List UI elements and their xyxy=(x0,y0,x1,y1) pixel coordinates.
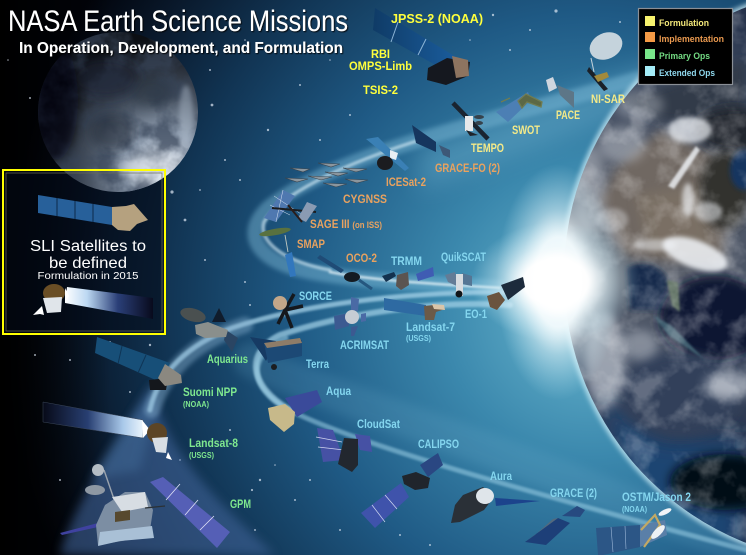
satellite: JPSS-2 xyxy=(373,8,470,85)
title: NASA Earth Science Missions xyxy=(8,5,348,38)
label: OSTM/Jason 2 agency: (NOAA) xyxy=(622,505,647,514)
satellites: CYGNSS constellation xyxy=(285,163,368,187)
satellite: CloudSat xyxy=(316,428,372,472)
satellite: OCO-2 xyxy=(317,255,372,289)
label: CALIPSO: CALIPSO xyxy=(418,439,459,451)
label: TRMM: TRMM xyxy=(391,256,422,268)
label: EO-1: EO-1 xyxy=(465,309,487,321)
satellite: lower SLI xyxy=(33,284,153,319)
label: OSTM/Jason 2: OSTM/Jason 2 xyxy=(622,492,691,504)
label: OMPS-Limb: OMPS-Limb xyxy=(349,61,412,73)
heading: SLI Satellites to be defined: SLI Satellites to xyxy=(30,238,146,255)
satellite: ISS xyxy=(264,190,317,222)
satellite: SORCE xyxy=(273,294,303,328)
label: SAGE III (on ISS): SAGE III (on ISS) xyxy=(310,219,382,231)
label: RBI: RBI xyxy=(371,49,390,61)
label: CloudSat: CloudSat xyxy=(357,419,400,431)
label: QuikSCAT: QuikSCAT xyxy=(441,252,486,264)
satellite: Aquarius xyxy=(179,305,238,352)
label: ICESat-2: ICESat-2 xyxy=(386,177,426,189)
label: Landsat-7: Landsat-7 xyxy=(406,322,455,334)
earth xyxy=(560,0,746,555)
satellite: CALIPSO xyxy=(361,453,443,528)
label: Aquarius: Aquarius xyxy=(207,354,248,366)
satellite: Aqua xyxy=(268,390,322,432)
label: SORCE: SORCE xyxy=(299,291,332,303)
light streak towards top right xyxy=(420,30,746,190)
label: Aqua: Aqua xyxy=(326,386,352,398)
label: Terra: Terra xyxy=(306,359,329,371)
satellite: Aura xyxy=(451,487,540,523)
satellite: QuikSCAT xyxy=(445,272,472,298)
clouds xyxy=(574,10,746,542)
label: NI-SAR: NI-SAR xyxy=(591,94,626,106)
label: PACE: PACE xyxy=(556,110,580,122)
orbit swooshes xyxy=(150,78,746,550)
label: Landsat-8 agency: (USGS) xyxy=(189,451,214,460)
label: GRACE (2): GRACE (2) xyxy=(550,488,597,500)
satellite: Landsat-8 xyxy=(43,402,172,460)
star field xyxy=(7,9,621,546)
legend xyxy=(638,8,732,84)
label: SMAP: SMAP xyxy=(297,239,325,251)
satellite: TEMPO xyxy=(453,103,488,139)
label: TEMPO: TEMPO xyxy=(471,143,504,155)
moon xyxy=(34,32,198,192)
sublabel: Formulation in 2015: Formulation in 2015 xyxy=(38,271,139,282)
label: Suomi NPP: Suomi NPP xyxy=(183,387,237,399)
label: SWOT: SWOT xyxy=(512,125,540,137)
legend item: Implementation: Implementation xyxy=(659,34,724,45)
satellite: upper SLI xyxy=(38,195,148,231)
satellite: SMAP xyxy=(259,226,296,277)
label: Landsat-7 agency: (USGS) xyxy=(406,334,431,343)
satellite: SWOT xyxy=(496,92,542,122)
label: Aura: Aura xyxy=(490,471,513,483)
satellite: GRACE-FO (2) xyxy=(412,125,450,158)
satellite: PACE xyxy=(546,77,574,108)
legend item: Formulation: Formulation xyxy=(659,18,709,29)
ocean: Gulf and Atlantic xyxy=(627,264,668,310)
satellite: ICESat-2 xyxy=(366,137,409,171)
label: GPM: GPM xyxy=(230,499,251,511)
satellite: OSTM/Jason 2 xyxy=(596,507,672,555)
legend item: Primary Ops: Primary Ops xyxy=(659,51,710,62)
label: ACRIMSAT: ACRIMSAT xyxy=(340,340,389,352)
heading line two: be defined xyxy=(49,255,127,272)
label: Suomi NPP agency: (NOAA) xyxy=(183,400,209,409)
satellite: TRMM xyxy=(382,267,434,290)
label: CYGNSS: CYGNSS xyxy=(343,194,387,206)
label: GRACE-FO (2): GRACE-FO (2) xyxy=(435,163,500,175)
label: OCO-2: OCO-2 xyxy=(346,253,377,265)
satellite: Terra xyxy=(250,337,302,370)
label: Landsat-8: Landsat-8 xyxy=(189,438,239,450)
panel: SLI satellites box xyxy=(3,170,165,334)
satellite: NI-SAR xyxy=(585,27,627,91)
land: North America xyxy=(600,130,728,262)
fan of light below Suomi NPP and Landsat-8 xyxy=(60,372,275,555)
subtitle: In Operation, Development, and Formulation xyxy=(19,40,343,57)
satellite: GPM xyxy=(60,464,230,548)
satellite: GRACE (2) xyxy=(525,506,585,545)
satellite: Suomi NPP xyxy=(95,337,182,390)
label: TSIS-2: TSIS-2 xyxy=(363,85,398,97)
satellite: ACRIMSAT xyxy=(334,297,366,336)
satellite: Landsat-7 xyxy=(384,298,445,320)
label: JPSS-2: JPSS-2 (NOAA) xyxy=(391,12,483,26)
legend item: Extended Ops: Extended Ops xyxy=(659,68,715,79)
sun glare xyxy=(471,164,641,400)
satellite: EO-1 xyxy=(487,277,525,310)
